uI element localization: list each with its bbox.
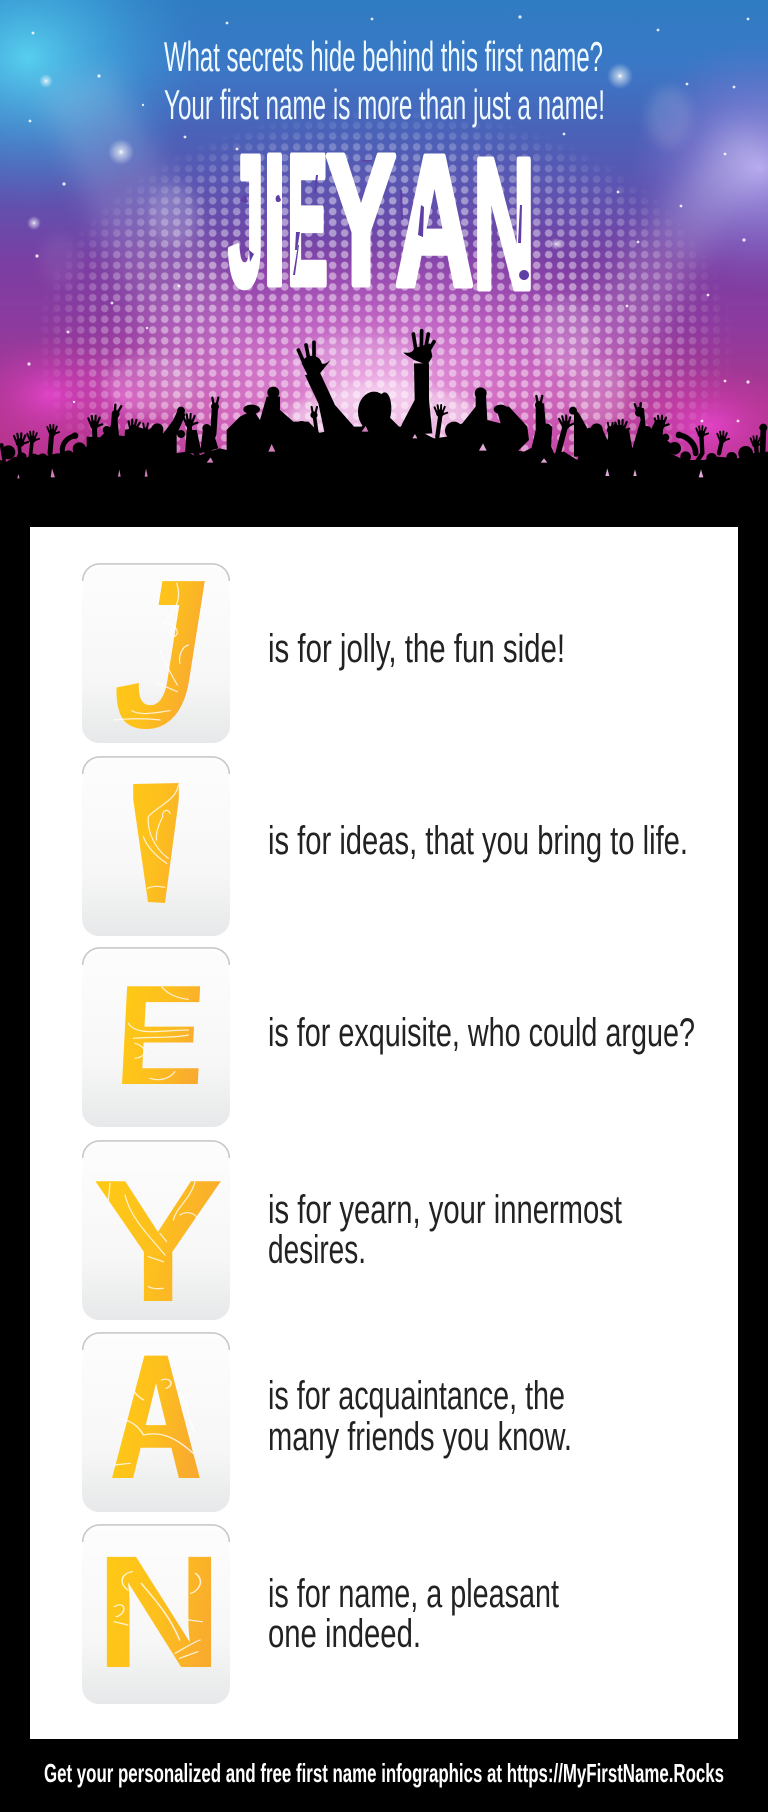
title: name JIEYAN: J xyxy=(228,118,264,325)
icon: tile I xyxy=(82,756,230,936)
icon: tile E xyxy=(82,947,230,1127)
icon: tile E: E xyxy=(111,956,210,1115)
text: A meaning: is for acquaintance, the xyxy=(268,1374,565,1418)
sparkles xyxy=(27,15,750,422)
title: name JIEYAN: E xyxy=(287,117,328,324)
title: name JIEYAN: A xyxy=(395,118,474,325)
row J: jolly xyxy=(82,536,565,773)
text: Y meaning: desires. xyxy=(268,1228,366,1272)
icon: tile J: J xyxy=(101,536,222,773)
crowd: left half xyxy=(0,342,390,490)
concert stage background xyxy=(0,0,768,462)
title distress marks xyxy=(240,160,529,280)
icon: tile A: A xyxy=(111,1321,201,1513)
row A: acquaintance xyxy=(82,1321,572,1513)
icon: tile Y: Y xyxy=(92,1143,224,1338)
text: N xyxy=(473,121,535,328)
text: A meaning: many friends you know. xyxy=(268,1415,572,1459)
icon: tile I: I xyxy=(112,741,200,953)
cyan glow xyxy=(0,0,203,208)
title: name JIEYAN xyxy=(228,117,535,328)
heading: tagline xyxy=(164,33,605,128)
text: Y meaning: is for yearn, your innermost xyxy=(268,1188,622,1232)
row E: exquisite xyxy=(82,947,695,1127)
periwinkle glow xyxy=(630,43,768,293)
title: name JIEYAN: I xyxy=(263,117,286,324)
text: N meaning: is for name, a pleasant xyxy=(268,1572,559,1616)
row I: ideas xyxy=(82,741,688,953)
icon: tile N: N xyxy=(95,1522,223,1701)
crowd: right half xyxy=(378,331,768,490)
row Y: yearn xyxy=(82,1140,622,1338)
text: A meaning xyxy=(268,1374,572,1459)
dot matrix xyxy=(44,114,720,460)
text: J meaning: is for jolly, the fun side! xyxy=(268,627,565,671)
text: N meaning: one indeed. xyxy=(268,1612,421,1656)
row N: name xyxy=(82,1522,559,1704)
title: name JIEYAN: Y xyxy=(326,117,396,324)
text: Y meaning xyxy=(268,1188,622,1272)
crowd silhouette xyxy=(0,331,768,530)
panel: white letter list xyxy=(30,527,738,1739)
text: N meaning xyxy=(268,1572,559,1656)
